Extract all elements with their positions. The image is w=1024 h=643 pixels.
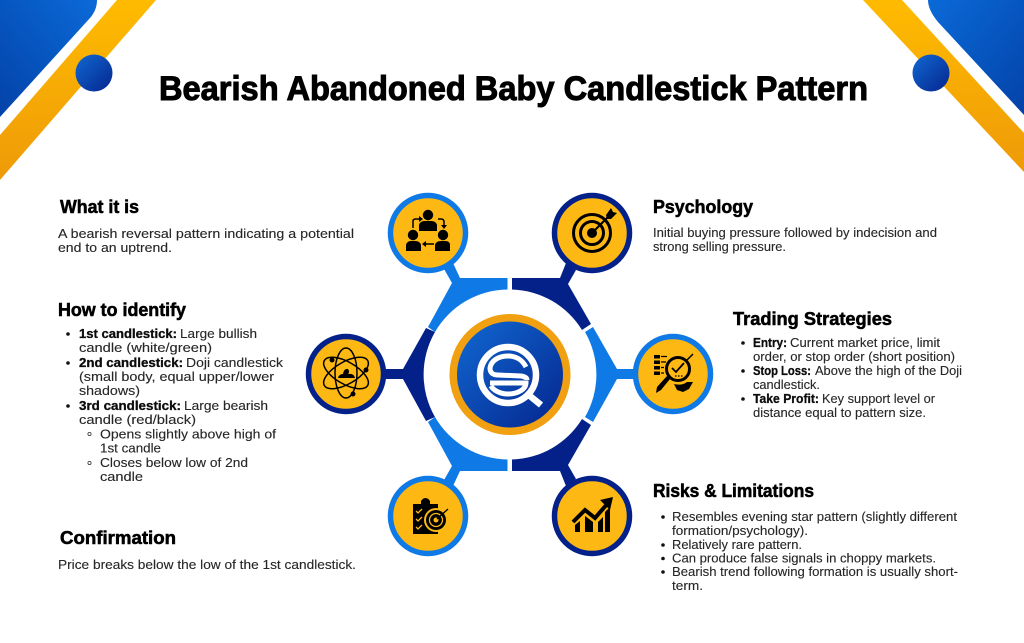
bullet: stop loss xyxy=(741,363,962,392)
bullet: rare: Relatively rare pattern. xyxy=(672,537,802,552)
corner decoration: top left xyxy=(0,0,156,180)
heading: risks and limitations: Risks & Limitations xyxy=(653,481,814,501)
bullet: entry: Entry: xyxy=(753,335,787,350)
heading: confirmation: Confirmation xyxy=(60,528,176,548)
bullet: 1st candlestick: 1st candlestick: xyxy=(79,326,177,341)
panel: risks and limitations xyxy=(653,481,958,593)
text: psychology: Initial buying pressure followed by indecision and xyxy=(653,225,937,240)
bullet: 3rd candlestick: candle (red/black) xyxy=(79,412,196,427)
heading: trading strategies: Trading Strategies xyxy=(733,309,892,329)
hub: connector ring xyxy=(380,263,640,486)
panel: psychology xyxy=(653,197,937,254)
bullet: 2nd candlestick: (small body, equal upper/lower xyxy=(79,369,275,384)
text: psychology xyxy=(653,225,937,254)
sub-bullet: opens: Opens slightly above high of xyxy=(100,426,276,442)
bullet: 3rd candlestick: Large bearish xyxy=(184,398,268,413)
bullet: stop loss: candlestick. xyxy=(753,377,820,392)
bullet: short term: term. xyxy=(672,578,703,593)
text: what it is: end to an uptrend. xyxy=(58,240,172,255)
title: Bearish Abandoned Baby Candlestick Pattern xyxy=(159,70,868,108)
bullet: take profit: Take Profit: xyxy=(753,391,819,406)
sub-bullet: opens xyxy=(88,426,276,456)
bullet: 1st candlestick xyxy=(66,326,257,355)
panel: how to identify xyxy=(58,300,284,484)
bullet: take profit xyxy=(741,391,936,420)
sub-bullet: closes xyxy=(88,455,248,484)
corner decoration: top right xyxy=(863,0,1024,172)
bullet: evening star: formation/psychology). xyxy=(672,523,808,538)
bullet: entry: Current market price, limit xyxy=(790,335,940,350)
hub: central logo xyxy=(450,314,570,435)
text: what it is xyxy=(58,226,354,255)
bullet: false signals: Can produce false signals in choppy markets. xyxy=(672,550,936,566)
bullet: 2nd candlestick: shadows) xyxy=(79,383,140,398)
sub-bullet: closes: candle xyxy=(100,469,143,484)
bullet: stop loss: Above the high of the Doji xyxy=(815,363,962,378)
bullet: 1st candlestick: Large bullish xyxy=(180,326,257,341)
icon: team (top left) xyxy=(390,196,466,270)
icon: target (top right) xyxy=(554,196,630,270)
sub-bullet: opens: 1st candle xyxy=(100,440,161,456)
bullet: short term xyxy=(661,564,958,593)
bullet: 3rd candlestick: 3rd candlestick: xyxy=(79,398,181,413)
panel: confirmation xyxy=(58,528,356,572)
bullet: 3rd candlestick xyxy=(66,398,268,427)
heading: psychology: Psychology xyxy=(653,197,753,217)
text: confirmation: Price breaks below the low of the 1st candlestick. xyxy=(58,557,356,572)
sub-bullet: closes: Closes below low of 2nd xyxy=(100,455,248,470)
bullet: evening star: Resembles evening star pattern (slightly different xyxy=(672,509,957,524)
bullet: entry: order, or stop order (short position) xyxy=(753,349,955,364)
panel: trading strategies xyxy=(733,309,962,420)
heading: what it is: What it is xyxy=(60,197,139,217)
heading: how to identify: How to identify xyxy=(58,300,186,320)
bullet: 2nd candlestick: 2nd candlestick: xyxy=(79,355,183,370)
icon: chart (bottom right) xyxy=(554,478,630,554)
text: psychology: strong selling pressure. xyxy=(653,239,786,254)
bullet: 2nd candlestick xyxy=(66,355,284,398)
bullet: take profit: distance equal to pattern size. xyxy=(753,405,926,420)
bullet: 1st candlestick: candle (white/green) xyxy=(79,340,212,355)
icon: review checklist (right) xyxy=(636,336,710,412)
icon: clipboard target (bottom left) xyxy=(390,478,466,554)
bullet: stop loss: Stop Loss: xyxy=(753,363,811,378)
bullet: 2nd candlestick: Doji candlestick xyxy=(186,355,284,370)
bullet: entry xyxy=(741,335,955,364)
bullet: take profit: Key support level or xyxy=(822,391,936,406)
bullet: evening star xyxy=(661,509,957,538)
bullet: short term: Bearish trend following formation is usually short- xyxy=(672,564,958,579)
text: what it is: A bearish reversal pattern indicating a potential xyxy=(58,226,354,241)
panel: what it is xyxy=(58,197,354,255)
icon: atom (left) xyxy=(308,336,384,412)
